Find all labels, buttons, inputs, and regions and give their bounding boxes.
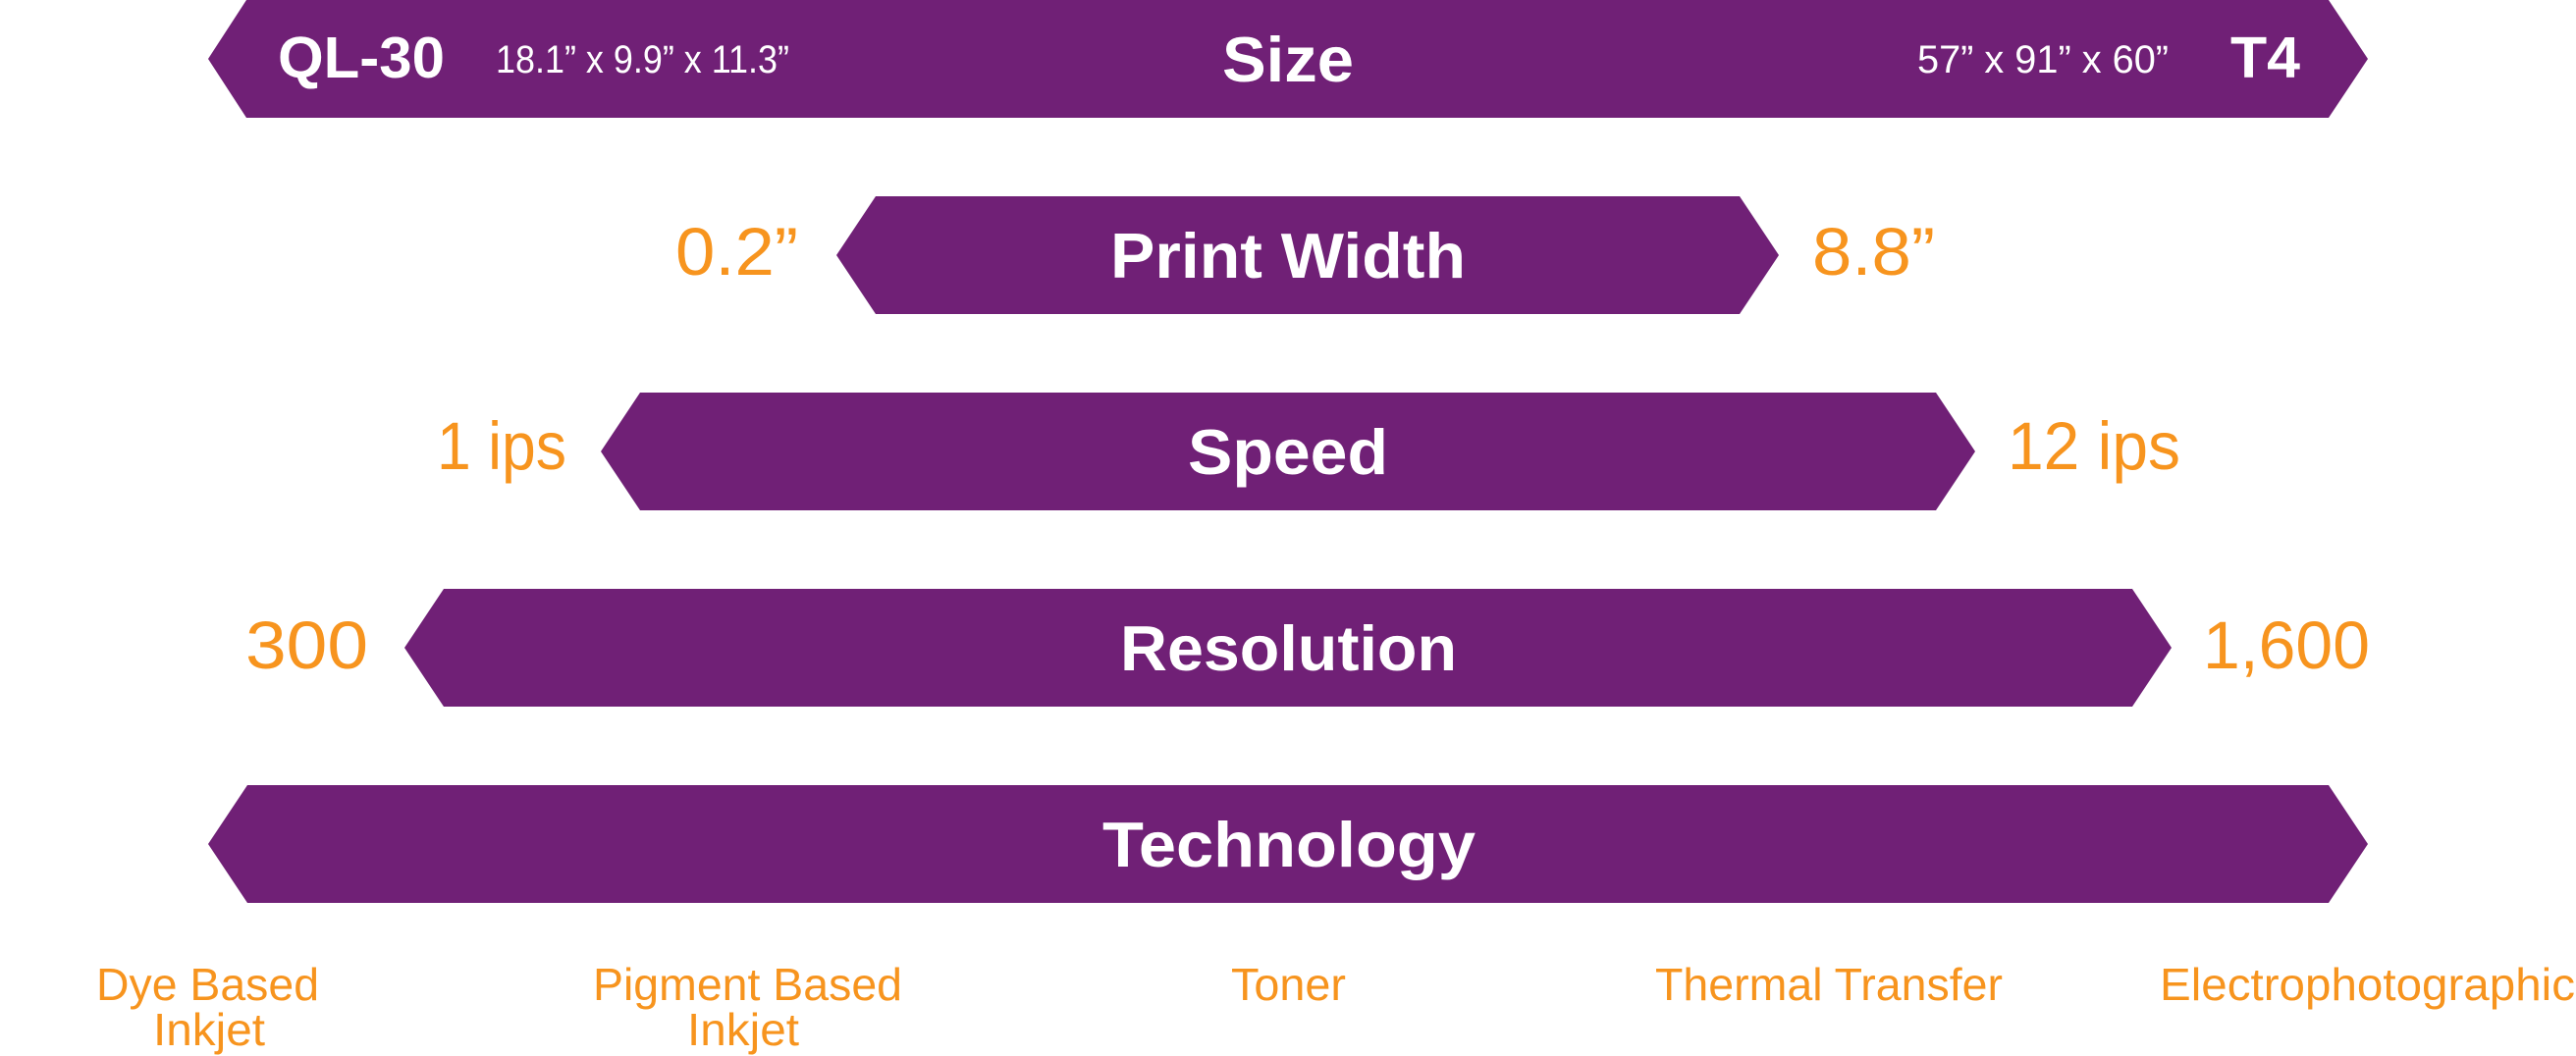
QL-30 dimensions: 18.1” x 9.9” x 11.3” [496,38,789,81]
resolution banner [404,589,2172,707]
speed banner [601,393,1975,510]
label: dye based inkjet: Dye Based [96,959,319,1010]
speed minimum: 1 ips [437,408,566,484]
label: toner: Toner [1231,959,1346,1010]
resolution maximum: 1,600 [2203,607,2370,683]
print width banner [836,196,1779,314]
label: pigment based inkjet: Pigment Based [593,959,902,1010]
print width heading: Print Width [1110,220,1466,291]
label: T4 model: T4 [2230,26,2300,90]
speed heading: Speed [1188,416,1388,488]
label: QL-30 model: QL-30 [278,26,445,90]
label: pigment based inkjet [593,959,902,1055]
panel: speed row [437,393,2180,510]
panel: resolution row [245,589,2370,707]
speed maximum: 12 ips [2008,408,2180,484]
technology banner [208,785,2368,903]
print width maximum: 8.8” [1812,214,1935,290]
label: dye based inkjet: Inkjet [153,1004,265,1055]
T4 dimensions: 57” x 91” x 60” [1917,38,2169,81]
label: electrophotographic: Electrophotographic [2160,959,2575,1010]
print width minimum: 0.2” [675,214,798,290]
label: thermal transfer: Thermal Transfer [1655,959,2003,1010]
resolution minimum: 300 [245,607,368,683]
label: pigment based inkjet: Inkjet [687,1004,799,1055]
panel: technology row [96,785,2575,1055]
size banner [208,0,2368,118]
technology heading: Technology [1102,809,1476,880]
panel: size row [208,0,2368,118]
label: dye based inkjet [96,959,319,1055]
resolution heading: Resolution [1120,612,1457,684]
panel: print width row [675,196,1935,314]
size heading: Size [1222,24,1354,95]
